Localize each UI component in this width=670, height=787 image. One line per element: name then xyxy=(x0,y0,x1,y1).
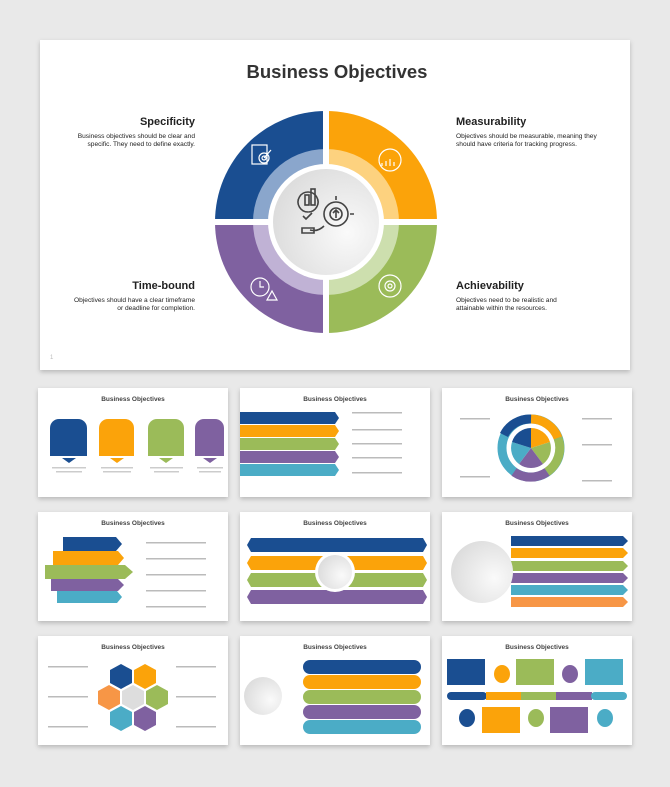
text block: time-bound: Time-bound xyxy=(132,280,195,292)
text block: measurability xyxy=(456,116,597,148)
panel: thumbnail 6 circle with bands: Business Objectives xyxy=(505,520,569,527)
text block: time-bound: Objectives should have a clear timeframe xyxy=(74,297,195,304)
text block: measurability: Measurability xyxy=(456,116,527,128)
panel: thumbnail 5 two-sided bands: Business Objectives xyxy=(303,520,367,527)
panel: thumbnail 1 tabs: Business Objectives xyxy=(101,396,165,403)
panel: thumbnail 7 hexagons: Business Objectives xyxy=(101,644,165,651)
text block: measurability: Objectives should be measurable, meaning they xyxy=(456,133,597,140)
text block: achievability xyxy=(456,280,557,312)
panel: thumbnail 9 timeline: Business Objectives xyxy=(505,644,569,651)
panel: thumbnail 2 arrows list xyxy=(240,388,430,497)
panel: main slide: 1 xyxy=(50,355,54,361)
text block: specificity: Specificity xyxy=(140,116,196,128)
panel: thumbnail 1 tabs xyxy=(38,388,228,497)
panel: thumbnail 3 donut: Business Objectives xyxy=(505,396,569,403)
panel: thumbnail 8 rounded bars xyxy=(240,636,430,745)
title: Business Objectives xyxy=(247,61,427,82)
icon: time-bound clock xyxy=(251,278,277,300)
text block: achievability: Objectives need to be realistic and xyxy=(456,297,557,304)
text block: specificity: specific. They need to define exactly. xyxy=(87,141,195,148)
panel: thumbnail 4 stacked arrows: Business Objectives xyxy=(101,520,165,527)
icon: measurability gauge xyxy=(379,149,401,171)
panel: thumbnail 2 arrows list: Business Objectives xyxy=(303,396,367,403)
icon: achievability cycle xyxy=(379,275,401,297)
panel: main slide xyxy=(40,40,630,370)
panel: thumbnail 9 timeline xyxy=(442,636,632,745)
text block: measurability: should have criteria for tracking progress. xyxy=(456,141,577,148)
text block: time-bound xyxy=(74,280,195,312)
panel: thumbnail 6 circle with bands xyxy=(442,512,632,621)
text block: achievability: Achievability xyxy=(456,280,525,292)
panel: thumbnail 4 stacked arrows xyxy=(38,512,228,621)
text block: time-bound: or deadline for completion. xyxy=(117,305,195,312)
text block: achievability: attainable within the resources. xyxy=(456,305,547,312)
icon: bulb and target xyxy=(298,189,354,233)
text block: specificity: Business objectives should be clear and xyxy=(78,133,195,140)
panel: thumbnail 5 two-sided bands xyxy=(240,512,430,621)
chart: quadrant donut xyxy=(212,108,440,336)
panel: thumbnail 3 donut xyxy=(442,388,632,497)
icon: specificity clipboard xyxy=(252,145,271,164)
text block: specificity xyxy=(78,116,196,148)
panel: thumbnail 7 hexagons xyxy=(38,636,228,745)
panel: thumbnail 8 rounded bars: Business Objectives xyxy=(303,644,367,651)
